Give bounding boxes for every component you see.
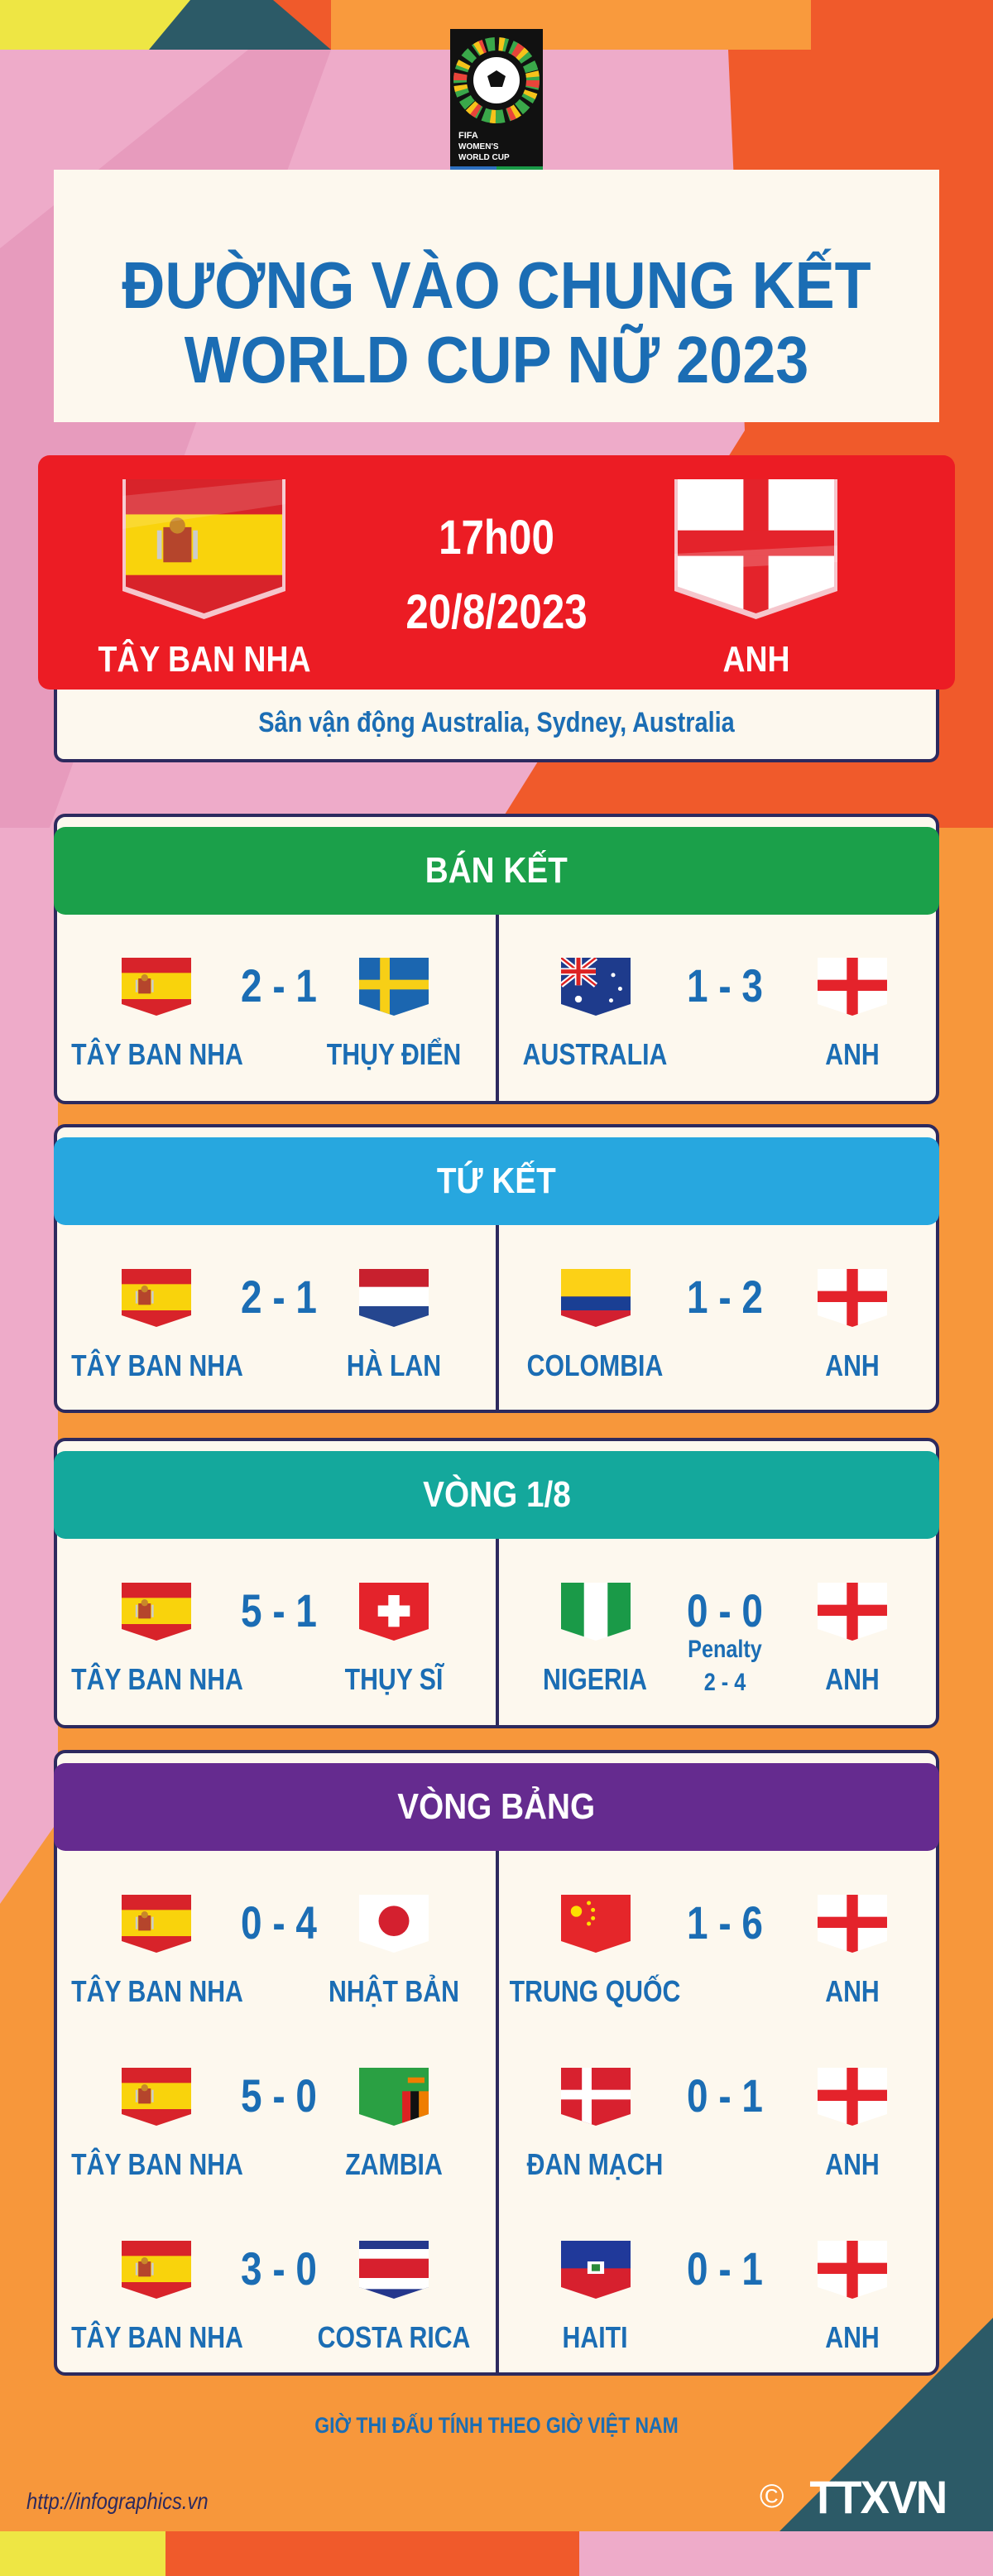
panel: Vòng 1/8: VÒNG 1/8 (423, 1474, 570, 1515)
panel: Tứ kết (54, 1124, 939, 1413)
panel: Vòng 1/8: 0 - 0 (687, 1584, 763, 1636)
time and date: 17h00 (439, 511, 554, 565)
logo: FIFA Women's World Cup 2023: FIFA (458, 131, 478, 141)
time and date (405, 511, 588, 639)
panel: Vòng bảng: HAITI (563, 2320, 627, 2354)
logo: FIFA Women's World Cup 2023 (450, 29, 543, 203)
panel: Vòng 1/8: 2 - 4 (704, 1669, 746, 1696)
panel: Vòng bảng: ĐAN MẠCH (527, 2147, 663, 2181)
panel: Vòng bảng: ANH (825, 2320, 880, 2354)
panel: Vòng 1/8 (54, 1438, 939, 1728)
panel: Vòng bảng: 5 - 0 (241, 2069, 317, 2122)
logo: FIFA Women's World Cup 2023: 23 (501, 186, 518, 203)
logo: FIFA Women's World Cup 2023: NZ (455, 186, 475, 203)
panel: Tứ kết: HÀ LAN (347, 1348, 441, 1382)
panel: Vòng 1/8: THỤY SĨ (345, 1662, 443, 1696)
logo: TTXVN: TTXVN (809, 2471, 946, 2523)
flag: Spain (122, 479, 285, 619)
panel: Vòng bảng: COSTA RICA (318, 2320, 470, 2354)
panel: Tứ kết: TỨ KẾT (437, 1161, 556, 1201)
panel: Bán kết: 2 - 1 (241, 959, 317, 1012)
panel: Vòng bảng: ZAMBIA (345, 2147, 443, 2181)
panel: Vòng bảng: ANH (825, 2147, 880, 2181)
panel: Vòng bảng: 0 - 4 (241, 1896, 317, 1949)
panel: Bán kết: ANH (825, 1037, 880, 1071)
panel: Vòng bảng: 0 - 1 (687, 2242, 763, 2295)
time and date: 20/8/2023 (405, 585, 588, 639)
venue (54, 690, 939, 762)
panel: Vòng bảng: 0 - 1 (687, 2069, 763, 2122)
panel: Vòng bảng (54, 1750, 939, 2376)
panel: Tứ kết: ANH (825, 1348, 880, 1382)
title: ĐƯỜNG VÀO CHUNG KẾT (122, 248, 871, 322)
logo: FIFA Women's World Cup 2023: AU (455, 170, 477, 186)
logo: FIFA Women's World Cup 2023: WOMEN'S (458, 142, 499, 151)
final match box: ANH (722, 639, 790, 680)
panel: Vòng 1/8: TÂY BAN NHA (71, 1662, 243, 1696)
panel: Vòng bảng: 3 - 0 (241, 2242, 317, 2295)
logo: TTXVN: © (760, 2478, 784, 2515)
panel: Vòng 1/8: ANH (825, 1662, 880, 1696)
footnote: GIỜ THI ĐẤU TÍNH THEO GIỜ VIỆT NAM (314, 2413, 679, 2438)
panel: Bán kết (54, 814, 939, 1104)
panel: Vòng bảng: TÂY BAN NHA (71, 2147, 243, 2181)
panel: Vòng bảng: TÂY BAN NHA (71, 1974, 243, 2008)
logo: FIFA Women's World Cup 2023: WORLD CUP (458, 153, 510, 162)
title (122, 248, 871, 396)
source url: http://infographics.vn (26, 2488, 209, 2514)
panel: Vòng bảng: TÂY BAN NHA (71, 2320, 243, 2354)
panel: Tứ kết: COLOMBIA (527, 1348, 663, 1382)
flag: England (674, 479, 837, 619)
panel: Vòng bảng: 1 - 6 (687, 1896, 763, 1949)
panel: Vòng bảng: NHẬT BẢN (329, 1974, 459, 2008)
final match box (38, 455, 955, 690)
panel: Vòng bảng: TRUNG QUỐC (510, 1974, 680, 2008)
panel: Vòng 1/8: NIGERIA (543, 1662, 647, 1696)
panel: Vòng 1/8: Penalty (688, 1636, 762, 1663)
panel: Tứ kết: 1 - 2 (687, 1271, 763, 1323)
panel: Bán kết: AUSTRALIA (523, 1037, 667, 1071)
title box (54, 170, 939, 422)
panel: Vòng bảng: VÒNG BẢNG (398, 1786, 595, 1827)
panel: Bán kết: BÁN KẾT (425, 850, 568, 891)
team names: TÂY BAN NHA (98, 639, 310, 680)
venue: Sân vận động Australia, Sydney, Australia (258, 707, 735, 738)
panel: Tứ kết: 2 - 1 (241, 1271, 317, 1323)
panel: Vòng 1/8: 5 - 1 (241, 1584, 317, 1636)
panel: Bán kết: THỤY ĐIỂN (327, 1037, 461, 1071)
panel: Vòng bảng: ANH (825, 1974, 880, 2008)
logo: FIFA Women's World Cup 2023: 20 (501, 170, 518, 186)
title: WORLD CUP NỮ 2023 (185, 323, 808, 396)
panel: Tứ kết: TÂY BAN NHA (71, 1348, 243, 1382)
panel: Bán kết: TÂY BAN NHA (71, 1037, 243, 1071)
panel: Bán kết: 1 - 3 (687, 959, 763, 1012)
